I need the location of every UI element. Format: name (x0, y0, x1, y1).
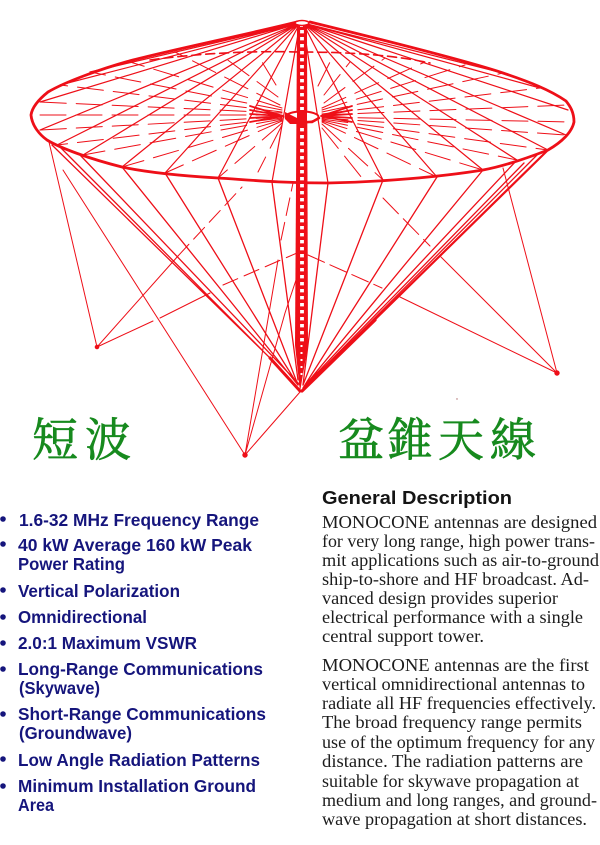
description paragraph 1: vanced design provides superior (322, 588, 558, 608)
feature text: Long-Range Communications (18, 659, 263, 679)
description paragraph 2: distance. The radiation patterns are (322, 751, 583, 771)
feature text (18, 510, 266, 815)
bullets (0, 516, 6, 789)
cone ribs (40, 23, 568, 183)
chinese title: monocone antenna: 盆錐天線 (338, 415, 536, 466)
apex cap (295, 20, 309, 26)
speck (456, 398, 458, 400)
feature text: 1.6-32 MHz Frequency Range (19, 510, 259, 530)
description paragraph 1: ship-to-shore and HF broadcast. Ad- (322, 569, 589, 589)
hub ring (285, 110, 319, 126)
description paragraph 2: medium and long ranges, and ground- (322, 790, 597, 810)
monocone antenna diagram (31, 20, 574, 457)
feature text: Minimum Installation Ground (18, 776, 256, 796)
feature text: 2.0:1 Maximum VSWR (18, 633, 197, 653)
description paragraph 1: MONOCONE antennas are designed (322, 512, 597, 532)
feature text: Low Angle Radiation Patterns (18, 750, 260, 770)
description paragraph 2: radiate all HF frequencies effectively. (322, 693, 596, 713)
description paragraph 2: wave propagation at short distances. (322, 809, 587, 829)
support tower (295, 27, 308, 392)
hub spoke convergence (250, 106, 352, 122)
feature list (0, 510, 266, 815)
back rim of cone (150, 52, 430, 63)
cone outline and rim (31, 22, 574, 183)
description paragraph 2: vertical omnidirectional antennas to (322, 674, 585, 694)
radial spokes (33, 52, 573, 180)
cables from rim to tower base (52, 145, 548, 391)
description paragraph 1: central support tower. (322, 626, 484, 646)
feature text: Area (18, 795, 54, 815)
chinese title: shortwave: 短波 (32, 415, 131, 466)
description paragraph 1: for very long range, high power trans- (322, 531, 595, 551)
description paragraph 2: The broad frequency range permits (322, 712, 582, 732)
feature text: Power Rating (18, 554, 125, 574)
description paragraph 2 (322, 655, 597, 829)
general description heading: General Description (322, 488, 512, 508)
feature text: Short-Range Communications (18, 704, 266, 724)
feature text: Vertical Polarization (18, 581, 180, 601)
description paragraph 2: use of the optimum frequency for any (322, 732, 595, 752)
description paragraph 1 (322, 512, 599, 646)
feature text: (Skywave) (19, 678, 100, 698)
feature text: (Groundwave) (19, 723, 132, 743)
feature text: Omnidirectional (18, 607, 147, 627)
description paragraph 2: MONOCONE antennas are the first (322, 655, 589, 675)
description paragraph 2: suitable for skywave propagation at (322, 771, 579, 791)
description paragraph 1: mit applications such as air-to-ground (322, 550, 599, 570)
feature text: 40 kW Average 160 kW Peak (18, 535, 252, 555)
guy wires and anchors (49, 142, 559, 457)
description paragraph 1: electrical performance with a single (322, 607, 583, 627)
